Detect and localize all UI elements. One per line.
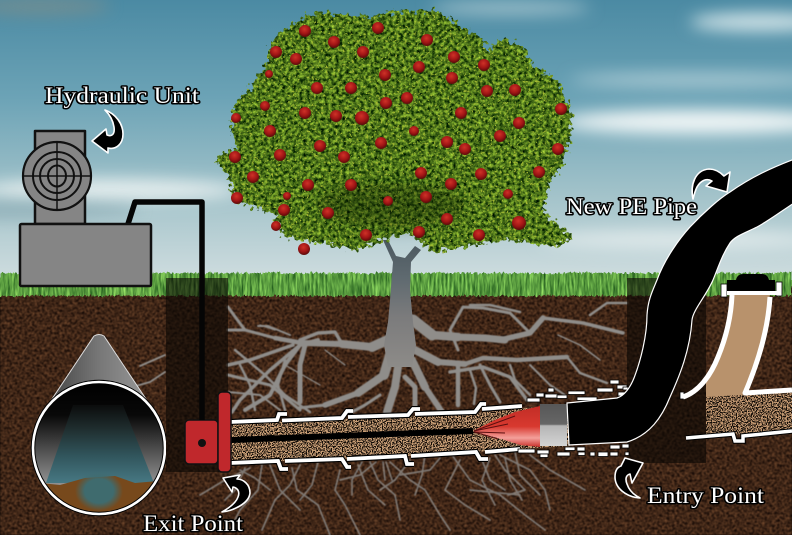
red cone	[473, 406, 540, 447]
bursting head	[473, 404, 567, 447]
cap black	[727, 274, 775, 291]
pipe cone	[50, 334, 148, 400]
arrow: entry point	[615, 458, 643, 498]
lateral walls	[683, 295, 732, 397]
tree roots above the pipe	[136, 303, 627, 412]
dial	[22, 141, 91, 211]
main pipe lower wall	[686, 431, 792, 441]
hydraulic hose	[128, 202, 202, 420]
arrow: exit point	[222, 475, 250, 512]
entry pit	[627, 278, 706, 463]
tank	[20, 224, 151, 286]
tree canopy	[215, 10, 572, 252]
existing lateral pipe	[683, 274, 792, 441]
arrow: hydraulic unit	[92, 110, 123, 153]
magnified pipe interior	[30, 334, 170, 520]
water trapezoid	[46, 405, 154, 483]
label: new PE pipe: New PE Pipe	[566, 194, 697, 219]
cone ribs	[474, 416, 515, 439]
canopy shadow	[315, 183, 465, 227]
apples	[229, 22, 567, 255]
main pipe speckled fill	[706, 392, 792, 437]
lateral tan fill	[706, 292, 770, 397]
exit pit	[166, 278, 228, 472]
grass strip	[0, 273, 792, 296]
label: entry point: Entry Point	[647, 483, 765, 508]
soil	[0, 292, 792, 535]
new PE pipe	[567, 157, 792, 445]
pipe wall bottom	[230, 449, 520, 469]
sediment	[46, 476, 154, 512]
water hump	[76, 476, 122, 510]
lens ring	[33, 382, 165, 514]
gray sleeve	[540, 404, 567, 446]
arrow: new PE pipe	[692, 169, 730, 199]
pipe wall top	[230, 404, 522, 422]
sky background	[0, 0, 792, 280]
motor housing	[35, 131, 85, 224]
lens disc	[35, 384, 163, 485]
hydraulic unit	[20, 131, 151, 286]
plate	[218, 392, 231, 472]
tree trunk	[383, 240, 421, 367]
pull block	[185, 420, 218, 464]
label: hydraulic unit: Hydraulic Unit	[45, 83, 200, 108]
pulling cable	[231, 431, 473, 440]
block hole	[198, 439, 206, 447]
tree roots below the pipe	[200, 452, 585, 535]
burst pipe fragments	[518, 380, 684, 458]
sewer pipe with speckled fill	[231, 405, 570, 463]
exit bracket	[185, 392, 231, 472]
cap white flanges	[721, 284, 727, 297]
